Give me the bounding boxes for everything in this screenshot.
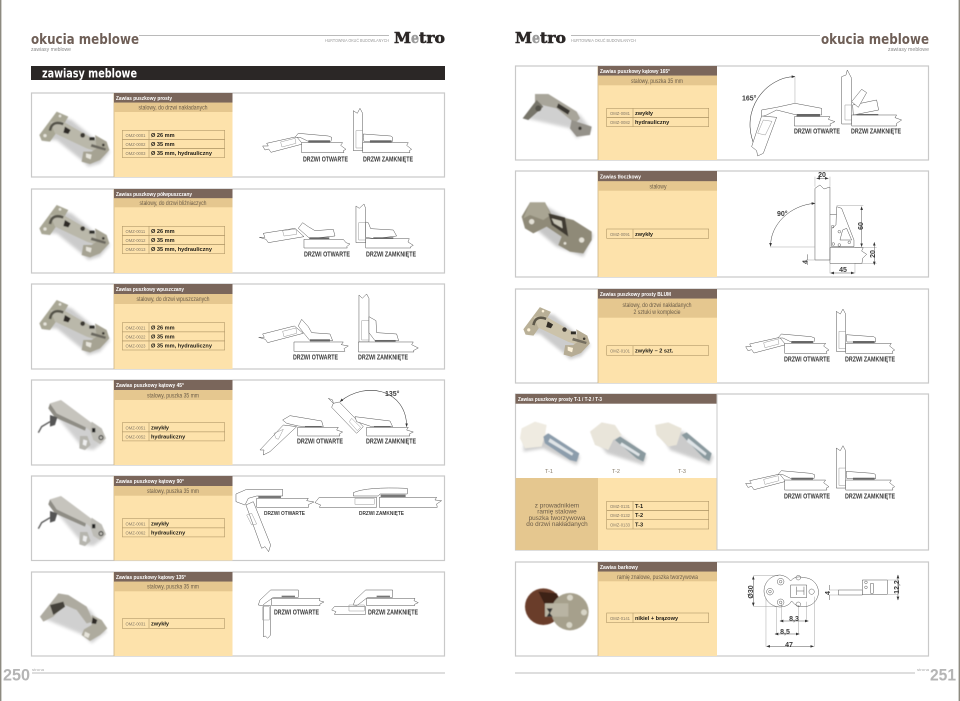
panel: zawias puszkowy prosty BLUM [516, 289, 928, 383]
logo metro right: M [515, 29, 532, 47]
table: OMZ-0131 [610, 504, 631, 509]
panel: zawias puszkowy kątowy 45: stalowy, puszka 35 mm [147, 392, 199, 399]
photo hinge [38, 496, 106, 546]
table: Ø 35 mm, hydrauliczny [151, 344, 213, 350]
technical drawing [770, 177, 877, 273]
table: OMZ-0001 [126, 133, 146, 138]
panel: zawias puszkowy kątowy 135 [32, 572, 444, 656]
panel: zawias puszkowy kątowy 165: DRZWI ZAMKNIĘTE [851, 128, 901, 136]
table: Ø 35 mm [151, 142, 175, 148]
page edge left [0, 0, 1, 701]
table: OMZ-0133 [610, 522, 631, 527]
table: OMZ-0002 [126, 142, 146, 147]
panel: zawias barkowy: ramię znalowe, puszka tworzywowa [617, 574, 698, 581]
logo metro left: M [394, 29, 411, 47]
table: Ø 26 mm [151, 229, 175, 235]
left page header: HURTOWNIA OKUĆ BUDOWLANYCH [325, 38, 389, 43]
table: hydrauliczny [151, 434, 186, 440]
panel: zawias puszkowy prosty: stalowy, do drzwi nakładanych [138, 104, 208, 112]
panel: zawias puszkowy prosty BLUM: DRZWI OTWARTE [784, 356, 830, 364]
photo hinge [523, 94, 592, 138]
panel: zawias tłoczkowy: stalowy [650, 184, 667, 190]
photo hinge [40, 593, 107, 643]
right page header [515, 29, 929, 53]
table [122, 423, 225, 441]
table: T-1 [635, 504, 643, 510]
panel: zawias puszkowy półwpuszczany: DRZWI ZAMKNIĘTE [366, 252, 416, 258]
panel: zawias tłoczkowy: 45 [839, 267, 847, 274]
diagram [258, 590, 418, 638]
table: OMZ-0132 [610, 513, 631, 518]
table [607, 108, 709, 127]
logo metro right: tro [540, 29, 566, 47]
table: OMZ-0003 [126, 151, 146, 156]
diagram [236, 488, 442, 552]
table: OMZ-0012 [126, 238, 146, 243]
table: OMZ-0052 [126, 434, 146, 440]
panel: zawias barkowy [516, 562, 928, 656]
right page footer: strona [917, 667, 930, 672]
table: OMZ-0011 [126, 229, 146, 234]
panel: zawias puszkowy kątowy 90: DRZWI ZAMKNIĘTE [359, 511, 404, 517]
table: hydrauliczny [635, 120, 670, 126]
description: ramię stalowe [537, 509, 577, 516]
table: Ø 35 mm, hydrauliczny [151, 247, 213, 253]
panel: zawias puszkowy prosty BLUM: stalowy, do drzwi nakładanych [622, 302, 692, 309]
table: OMZ-0051 [126, 425, 146, 430]
table: OMZ-0141 [610, 616, 631, 621]
section title bar: zawiasy meblowe [42, 66, 137, 80]
table [607, 346, 709, 355]
panel: zawias puszkowy wpuszczany: stalowy, do drzwi wpuszczanych [136, 296, 210, 303]
panel: zawias puszkowy prosty T-1 T-2 T-3: T-1 [545, 469, 553, 475]
left page footer: strona [32, 667, 45, 672]
panel: zawias puszkowy półwpuszczany: stalowy, do drzwi bliźniaczych [140, 200, 207, 207]
panel: zawias puszkowy kątowy 90: stalowy, puszka 35 mm [147, 488, 199, 495]
page edge right [959, 0, 960, 701]
diagram [260, 390, 413, 455]
panel: zawias tłoczkowy: 4 [802, 260, 810, 264]
logo metro right [515, 29, 566, 47]
right page header: okucia meblowe [821, 32, 929, 48]
diagram [746, 309, 895, 353]
table: OMZ-0022 [126, 334, 146, 340]
technical drawing [753, 575, 898, 647]
panel: zawias puszkowy prosty BLUM: DRZWI ZAMKNIĘTE [845, 356, 895, 364]
right page header: zawiasy meblowe [888, 47, 929, 53]
panel: zawias puszkowy wpuszczany: DRZWI ZAMKNIĘTE [358, 354, 408, 362]
table: Ø 26 mm [151, 133, 175, 139]
panel: zawias barkowy: 4 [825, 591, 832, 595]
panel: zawias puszkowy prosty T-1 T-2 T-3 [516, 394, 928, 550]
table: Ø 26 mm [151, 325, 175, 331]
description: do drzwi nakładanych [526, 521, 588, 528]
photo hinge [38, 400, 106, 450]
panel: zawias puszkowy wpuszczany: Zawias puszkowy wpuszczany [116, 287, 185, 293]
table: zwykły [151, 521, 170, 527]
table [122, 226, 225, 254]
description: puszka tworzywowa [529, 515, 586, 522]
panel: zawias puszkowy prosty T-1 T-2 T-3: T-2 [612, 469, 620, 475]
panel: zawias puszkowy prosty BLUM: 2 sztuki w komplecie [634, 309, 681, 316]
right page header: HURTOWNIA OKUĆ BUDOWLANYCH [571, 38, 636, 43]
panel: zawias puszkowy prosty [32, 93, 444, 177]
section title bar [31, 66, 445, 80]
table [607, 229, 709, 238]
panel: zawias puszkowy kątowy 165: Zawias puszkowy kątowy 165° [600, 69, 670, 75]
panel: zawias barkowy: 12,2 [894, 580, 901, 594]
panel: zawias puszkowy kątowy 165: 165° [742, 94, 757, 102]
table: Ø 35 mm [151, 238, 175, 244]
panel: zawias puszkowy kątowy 135: DRZWI ZAMKNIĘTE [368, 610, 418, 616]
left page footer [3, 666, 445, 684]
diagram [259, 294, 418, 352]
description [526, 502, 588, 528]
panel: zawias puszkowy kątowy 45: DRZWI OTWARTE [297, 438, 343, 446]
diagram [263, 108, 412, 153]
diagram [750, 70, 902, 156]
table: OMZ-0013 [126, 247, 146, 252]
panel: zawias puszkowy prosty: DRZWI OTWARTE [303, 156, 348, 164]
panel: zawias barkowy: Zawias barkowy [600, 565, 639, 571]
panel: zawias puszkowy kątowy 45: DRZWI ZAMKNIĘTE [366, 438, 416, 446]
panel: zawias tłoczkowy: 20 [818, 172, 826, 179]
table: Ø 35 mm, hydrauliczny [151, 151, 213, 157]
panel: zawias puszkowy półwpuszczany: DRZWI OTWARTE [304, 252, 350, 258]
panel: zawias puszkowy kątowy 45: 135° [385, 390, 400, 398]
panel: zawias puszkowy kątowy 165 [516, 66, 928, 160]
table [122, 519, 225, 537]
right page footer [515, 666, 956, 684]
diagram [746, 446, 895, 490]
panel: zawias puszkowy prosty T-1 T-2 T-3: DRZWI ZAMKNIĘTE [845, 494, 895, 500]
panel: zawias puszkowy prosty: Zawias puszkowy prosty [116, 96, 173, 102]
panel: zawias puszkowy prosty: DRZWI ZAMKNIĘTE [363, 156, 413, 164]
panel: zawias tłoczkowy [516, 171, 928, 277]
table: OMZ-0062 [126, 530, 146, 536]
panel: zawias tłoczkowy: 90° [777, 210, 788, 218]
table [607, 501, 709, 529]
panel: zawias puszkowy prosty T-1 T-2 T-3: T-3 [678, 469, 686, 475]
table: zwykły [635, 111, 654, 117]
logo metro right: e [532, 29, 540, 47]
table: OMZ-0023 [126, 344, 146, 349]
right page footer: 251 [930, 666, 956, 684]
photo hinge [523, 307, 590, 359]
logo metro left: e [411, 29, 419, 47]
table: zwykły [151, 622, 170, 628]
panel: zawias puszkowy kątowy 90: Zawias puszkowy kątowy 90° [116, 479, 184, 485]
table [122, 619, 225, 628]
panel: zawias puszkowy kątowy 45: Zawias puszkowy kątowy 45° [116, 383, 184, 389]
table: nikiel + brązowy [635, 616, 679, 622]
table: OMZ-0021 [126, 325, 146, 330]
panel: zawias barkowy: 8,3 [789, 616, 799, 623]
panel: zawias tłoczkowy: 60 [858, 222, 865, 230]
photo hinge [525, 588, 589, 630]
panel: zawias puszkowy kątowy 90: DRZWI OTWARTE [264, 511, 305, 517]
table [122, 323, 225, 350]
photo hinge [39, 300, 110, 355]
panel: zawias puszkowy kątowy 165: DRZWI OTWARTE [794, 128, 840, 136]
table: zwykły [635, 232, 654, 238]
logo metro left: tro [419, 29, 445, 47]
panel: zawias barkowy: Ø30 [748, 585, 755, 599]
logo metro left [394, 29, 445, 47]
photos T-1 T-2 T-3 [520, 422, 713, 465]
panel: zawias puszkowy kątowy 90 [32, 476, 444, 560]
panel: zawias puszkowy prosty T-1 T-2 T-3: Zawias puszkowy prosty T-1 / T-2 / T-3 [518, 397, 602, 403]
panel: zawias tłoczkowy: Zawias tłoczkowy [600, 174, 642, 180]
table: OMZ-0081 [610, 111, 631, 116]
panel: zawias puszkowy kątowy 135: stalowy, puszka 35 mm [147, 584, 199, 591]
table [607, 613, 709, 623]
left page footer: 250 [3, 666, 30, 684]
photo hinge [522, 202, 593, 257]
table: zwykły – 2 szt. [635, 349, 674, 355]
panel: zawias puszkowy wpuszczany [32, 284, 444, 369]
panel: zawias puszkowy kątowy 135: Zawias puszkowy kątowy 135° [116, 575, 186, 581]
panel: zawias puszkowy półwpuszczany [32, 189, 444, 273]
table: OMZ-0061 [126, 521, 146, 526]
panel: zawias puszkowy prosty T-1 T-2 T-3: DRZWI OTWARTE [784, 494, 830, 500]
table: OMZ-0031 [126, 622, 146, 627]
table: hydrauliczny [151, 530, 186, 536]
left page header: okucia meblowe [31, 32, 139, 48]
panel: zawias puszkowy kątowy 135: DRZWI OTWARTE [274, 610, 319, 616]
panel: zawias barkowy: 47 [785, 642, 793, 649]
table [122, 130, 225, 158]
left page header [31, 29, 445, 53]
diagram [259, 204, 413, 248]
panel: zawias puszkowy kątowy 165: stalowy, puszka 35 mm [631, 78, 683, 85]
panel: zawias barkowy: 8,5 [780, 629, 790, 636]
left page header: zawiasy meblowe [31, 47, 71, 53]
table: T-3 [635, 522, 643, 528]
panel: zawias puszkowy półwpuszczany: Zawias puszkowy półwpuszczany [116, 192, 193, 198]
panel: zawias puszkowy kątowy 45 [32, 380, 444, 465]
table: OMZ-0082 [610, 120, 631, 125]
panel: zawias tłoczkowy: 20 [870, 250, 877, 258]
panel: zawias puszkowy wpuszczany: DRZWI OTWARTE [293, 354, 338, 362]
table: OMZ-0101 [610, 349, 631, 354]
panel: zawias puszkowy prosty BLUM: Zawias puszkowy prosty BLUM [600, 292, 671, 298]
description: z prowadnikiem [535, 502, 579, 510]
photo hinge [39, 205, 110, 260]
table: OMZ-0091 [610, 232, 631, 237]
table: zwykły [151, 425, 170, 431]
table: T-2 [635, 513, 643, 519]
photo hinge [39, 112, 110, 167]
table: Ø 35 mm [151, 334, 175, 340]
